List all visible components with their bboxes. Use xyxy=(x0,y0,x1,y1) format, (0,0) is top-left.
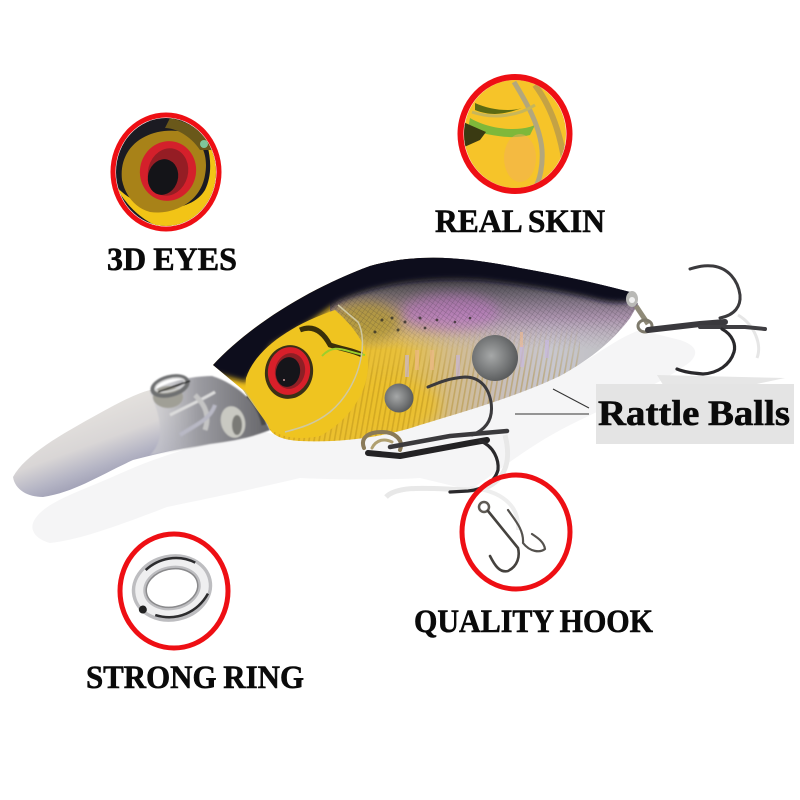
icon: split ring xyxy=(130,552,211,624)
lure eye xyxy=(260,341,318,403)
lure split ring on lip xyxy=(150,373,190,408)
gold gill plate xyxy=(245,310,368,438)
rear treble hook xyxy=(638,266,765,374)
callout: quality hook xyxy=(414,475,653,640)
front treble hook xyxy=(363,377,507,492)
holographic flecks xyxy=(405,340,549,377)
rattle balls label xyxy=(596,384,794,444)
callout: 3D eyes: 3D EYES xyxy=(107,242,237,278)
lure tail eyelet xyxy=(626,291,648,324)
rattle ball small xyxy=(384,384,414,412)
callout: quality hook: QUALITY HOOK xyxy=(414,604,653,640)
infographic: lure features xyxy=(13,74,794,688)
rattle ball large xyxy=(472,335,518,381)
callout: strong ring: STRONG RING xyxy=(86,660,304,696)
callout: 3D eyes xyxy=(107,115,237,278)
icon: eye close-up xyxy=(116,118,216,226)
speckles xyxy=(374,316,471,334)
lure head clear section xyxy=(150,376,270,455)
icon: skin close-up xyxy=(464,80,566,188)
lure lip xyxy=(13,380,267,497)
callout: real skin: REAL SKIN xyxy=(435,204,605,240)
rattle balls label: Rattle Balls xyxy=(598,393,790,433)
rattle balls pointer lines xyxy=(515,389,589,414)
lure reflection xyxy=(32,315,785,543)
black back of lure xyxy=(200,250,645,382)
callout: strong ring xyxy=(86,534,304,696)
lure body xyxy=(213,258,638,442)
callout: real skin xyxy=(435,77,605,240)
icon: treble hook xyxy=(479,502,545,571)
